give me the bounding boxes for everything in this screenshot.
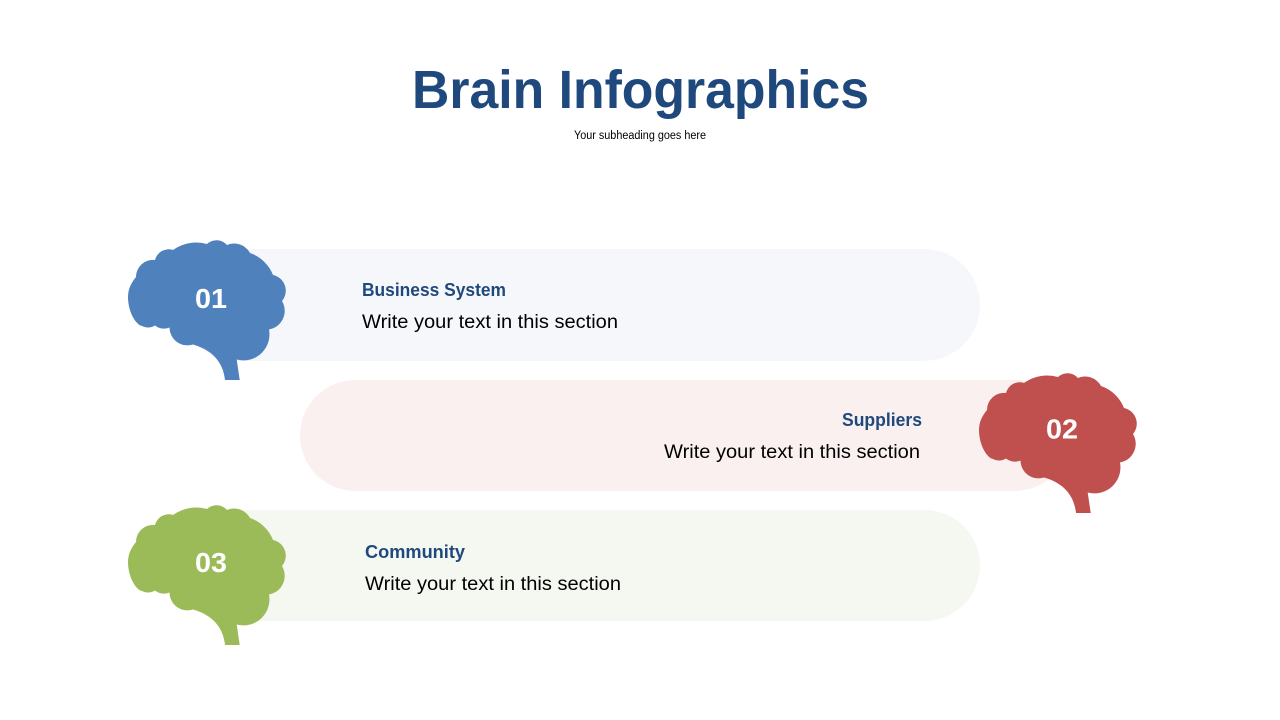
icon: blue brain	[128, 240, 286, 380]
panel: business system	[128, 240, 980, 380]
number 01: 01	[195, 283, 227, 314]
body text 2: Write your text in this section	[664, 441, 920, 463]
subheading: Your subheading goes here	[574, 130, 706, 142]
panel background 3	[180, 510, 980, 621]
heading: suppliers: Suppliers	[842, 409, 922, 430]
panel: suppliers	[300, 373, 1137, 513]
panel: community	[128, 505, 980, 645]
panel background 2	[300, 380, 1070, 491]
body text 1: Write your text in this section	[362, 311, 618, 333]
heading: business system: Business System	[362, 279, 506, 300]
panel background 1	[180, 249, 980, 361]
body text 3: Write your text in this section	[365, 573, 621, 595]
title: Brain Infographics	[412, 60, 869, 120]
heading: community: Community	[365, 541, 466, 562]
icon: green brain	[128, 505, 286, 645]
number 02: 02	[1046, 414, 1078, 444]
number 03: 03	[195, 547, 227, 578]
icon: red brain	[979, 373, 1137, 513]
